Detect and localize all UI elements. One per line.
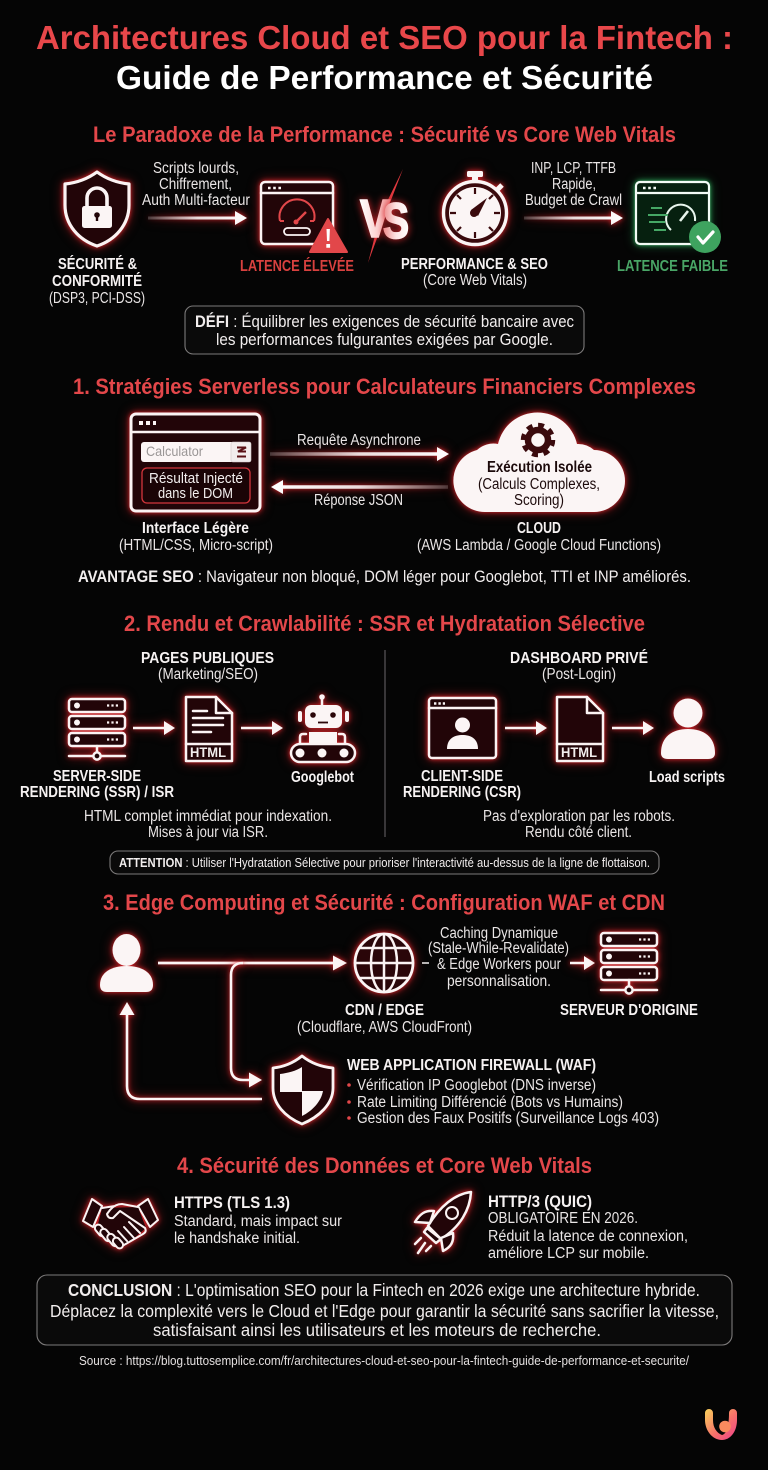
- icon: cloud execution: (Calculs Complexes,: [478, 476, 600, 493]
- text: waf: Vérification IP Googlebot (DNS inverse): [357, 1077, 596, 1094]
- label: sécurité et conformité: (DSP3, PCI-DSS): [49, 290, 145, 307]
- icon: cloud execution: Exécution Isolée: [487, 459, 592, 476]
- text: inp lcp ttfb: Rapide,: [552, 176, 596, 193]
- label: sécurité et conformité: [49, 254, 145, 307]
- callout: défi: [185, 306, 584, 354]
- text: http/3: HTTP/3 (QUIC): [488, 1192, 592, 1211]
- label: csr: [403, 768, 521, 801]
- icon: server: [69, 699, 125, 760]
- label: dashboard privé: (Post-Login): [542, 666, 616, 683]
- text: réponse json: Réponse JSON: [314, 492, 403, 509]
- heading: serverless: 1. Stratégies Serverless pour Calculateurs Financiers Complexes: [73, 374, 696, 399]
- icon: rocket: [415, 1192, 471, 1253]
- label: pages publiques: (Marketing/SEO): [158, 666, 258, 683]
- icon: user: [661, 698, 715, 759]
- text: scripts lourds: [142, 160, 250, 209]
- text: caching dynamique: & Edge Workers pour: [437, 956, 561, 973]
- text: pas d'exploration: Rendu côté client.: [525, 824, 632, 841]
- callout: conclusion: [37, 1275, 732, 1345]
- text: inp lcp ttfb: Budget de Crawl: [525, 192, 622, 209]
- label: sécurité et conformité: SÉCURITÉ &: [58, 254, 137, 273]
- icon: html document: HTML: [561, 744, 597, 760]
- icon: light interface window: Calculator: [146, 443, 203, 459]
- text: caching dynamique: Caching Dynamique: [440, 925, 558, 942]
- callout: défi: les performances fulgurantes exigées par Google.: [216, 331, 553, 349]
- callout: attention: ATTENTION : Utiliser l'Hydratation Sélective pour prioriser l'interactivité au-dessus de la ligne de flottaison.: [119, 856, 650, 870]
- text: http/3: [488, 1192, 688, 1262]
- icon: light interface window: [131, 414, 260, 511]
- arrow: cdn to origin: [570, 956, 595, 970]
- arrow: to high latency: [148, 211, 247, 225]
- label: csr: RENDERING (CSR): [403, 784, 521, 801]
- label: interface légère: [119, 520, 273, 554]
- label: ssr: [20, 768, 174, 801]
- arrow: request: [270, 447, 449, 461]
- label: dashboard privé: [510, 648, 648, 683]
- text: inp lcp ttfb: INP, LCP, TTFB: [531, 160, 616, 177]
- heading: paradoxe: Le Paradoxe de la Performance : Sécurité vs Core Web Vitals: [93, 122, 676, 147]
- arrow: html to googlebot: [241, 721, 283, 735]
- text: scripts lourds: Scripts lourds,: [153, 160, 239, 177]
- text: caching dynamique: (Stale-While-Revalidate): [428, 940, 569, 957]
- text: waf: Gestion des Faux Positifs (Surveillance Logs 403): [357, 1110, 659, 1127]
- text: http/3: OBLIGATOIRE EN 2026.: [488, 1210, 638, 1227]
- text: caching dynamique: [422, 925, 569, 990]
- icon: cloud execution: [453, 412, 625, 512]
- label: dashboard privé: DASHBOARD PRIVÉ: [510, 648, 648, 667]
- icon: origin server: [601, 933, 657, 994]
- text: https: [174, 1193, 342, 1247]
- text: pas d'exploration: Pas d'exploration par les robots.: [483, 808, 675, 825]
- arrow: to low latency: [524, 211, 623, 225]
- label: performance et seo: PERFORMANCE & SEO: [401, 256, 548, 273]
- panel: edge computing: [100, 925, 698, 1127]
- label: cdn edge: CDN / EDGE: [345, 1002, 424, 1019]
- arrow: html to user: [612, 721, 654, 735]
- panel: dashboard privé: [403, 648, 725, 841]
- icon: logo: [705, 1409, 737, 1440]
- text: html complet: Mises à jour via ISR.: [148, 824, 268, 841]
- text: inp lcp ttfb: [525, 160, 622, 209]
- label: performance et seo: (Core Web Vitals): [423, 272, 527, 289]
- label: cloud: [417, 520, 661, 554]
- icon: cloud execution: Scoring): [514, 492, 564, 509]
- arrow: user to cdn: [158, 956, 347, 970]
- text: http/3: Réduit la latence de connexion,: [488, 1228, 688, 1245]
- label: cloud: (AWS Lambda / Google Cloud Functions): [417, 537, 661, 554]
- text: html complet: [84, 808, 332, 841]
- arrow: server to html: [133, 721, 175, 735]
- label: latence élevée: LATENCE ÉLEVÉE: [240, 256, 354, 275]
- label: serveur d'origine: SERVEUR D'ORIGINE: [560, 1002, 698, 1019]
- label: pages publiques: PAGES PUBLIQUES: [141, 650, 274, 667]
- icon: versus: S: [383, 193, 409, 249]
- label: cdn edge: (Cloudflare, AWS CloudFront): [297, 1019, 472, 1036]
- icon: html document: HTML: [190, 744, 226, 760]
- text: https: le handshake initial.: [174, 1230, 300, 1247]
- label: interface légère: (HTML/CSS, Micro-script): [119, 537, 273, 554]
- callout: attention: [110, 851, 659, 874]
- icon: user: [100, 934, 153, 992]
- callout: défi: DÉFI : Équilibrer les exigences de sécurité bancaire avec: [195, 312, 574, 331]
- label: load scripts: Load scripts: [649, 769, 725, 786]
- icon: fast browser with check: [636, 182, 721, 253]
- text: waf: [347, 1057, 659, 1127]
- label: googlebot: Googlebot: [291, 769, 355, 786]
- panel: paradoxe de la performance: [49, 160, 728, 354]
- label: ssr: RENDERING (SSR) / ISR: [20, 784, 174, 801]
- label: latence faible: LATENCE FAIBLE: [617, 258, 728, 275]
- title: Architectures Cloud et SEO pour la Fintech :: [36, 19, 733, 56]
- text: scripts lourds: Chiffrement,: [159, 176, 232, 193]
- label: sécurité et conformité: CONFORMITÉ: [52, 271, 142, 290]
- arrow: branch to waf: [231, 963, 262, 1088]
- panel: serverless: [78, 412, 691, 586]
- text: html complet: HTML complet immédiat pour indexation.: [84, 808, 332, 825]
- heading: rendu: 2. Rendu et Crawlabilité : SSR et Hydratation Sélective: [124, 611, 645, 636]
- callout: conclusion: satisfaisant ainsi les utilisateurs et les moteurs de recherche.: [153, 1320, 601, 1340]
- heading: edge computing: 3. Edge Computing et Sécurité : Configuration WAF et CDN: [103, 890, 665, 915]
- text: requête asynchrone: Requête Asynchrone: [297, 432, 421, 449]
- icon: gear: [523, 425, 553, 455]
- text: https: HTTPS (TLS 1.3): [174, 1193, 290, 1212]
- icon: versus: [360, 169, 409, 263]
- icon: html document: [557, 697, 603, 761]
- text: waf: Rate Limiting Différencié (Bots vs Humains): [357, 1094, 623, 1111]
- icon: security shield with lock: [65, 172, 129, 246]
- arrow: response: [271, 480, 448, 494]
- panel: pages publiques: [20, 650, 355, 841]
- text: caching dynamique: personnalisation.: [447, 973, 551, 990]
- label: interface légère: Interface Légère: [142, 520, 249, 537]
- icon: handshake: [83, 1199, 158, 1250]
- text: https: Standard, mais impact sur: [174, 1213, 342, 1230]
- label: cdn edge: [297, 1002, 472, 1036]
- label: csr: CLIENT-SIDE: [421, 768, 503, 785]
- icon: html document: [186, 697, 232, 761]
- icon: light interface window: Résultat Injecté: [149, 471, 243, 487]
- callout: conclusion: CONCLUSION : L'optimisation SEO pour la Fintech en 2026 exige une architecture hybride.: [68, 1280, 700, 1300]
- source: Source : https://blog.tuttosemplice.com/fr/architectures-cloud-et-seo-pour-la-fintech-guide-de-performance-et-securite/: [79, 1354, 689, 1368]
- icon: slow browser with warning: [261, 182, 347, 252]
- label: pages publiques: [141, 650, 274, 683]
- label: cloud: CLOUD: [517, 520, 561, 537]
- icon: robot: [291, 694, 355, 762]
- arrow: waf back to user: [120, 1002, 262, 1099]
- label: ssr: SERVER-SIDE: [53, 768, 141, 785]
- text: avantage seo: AVANTAGE SEO : Navigateur non bloqué, DOM léger pour Googlebot, TTI et INP améliorés.: [78, 568, 691, 586]
- text: waf: WEB APPLICATION FIREWALL (WAF): [347, 1057, 596, 1074]
- arrow: browser to html: [505, 721, 547, 735]
- callout: conclusion: Déplacez la complexité vers le Cloud et l'Edge pour garantir la sécurité sans sacrifier la vitesse,: [50, 1301, 719, 1321]
- title: Guide de Performance et Sécurité: [116, 59, 653, 96]
- panel: sécurité des données: [83, 1192, 688, 1262]
- title: [36, 19, 733, 96]
- icon: globe: [355, 934, 413, 992]
- heading: sécurité des données: 4. Sécurité des Données et Core Web Vitals: [177, 1153, 592, 1178]
- text: pas d'exploration: [483, 808, 675, 841]
- icon: versus: V: [360, 189, 390, 249]
- icon: stopwatch: [444, 171, 506, 244]
- icon: waf shield: [273, 1056, 333, 1124]
- label: performance et seo: [401, 256, 548, 289]
- icon: browser with user: [429, 698, 496, 758]
- text: scripts lourds: Auth Multi-facteur: [142, 192, 250, 209]
- icon: light interface window: dans le DOM: [158, 486, 233, 502]
- text: http/3: améliore LCP sur mobile.: [488, 1245, 649, 1262]
